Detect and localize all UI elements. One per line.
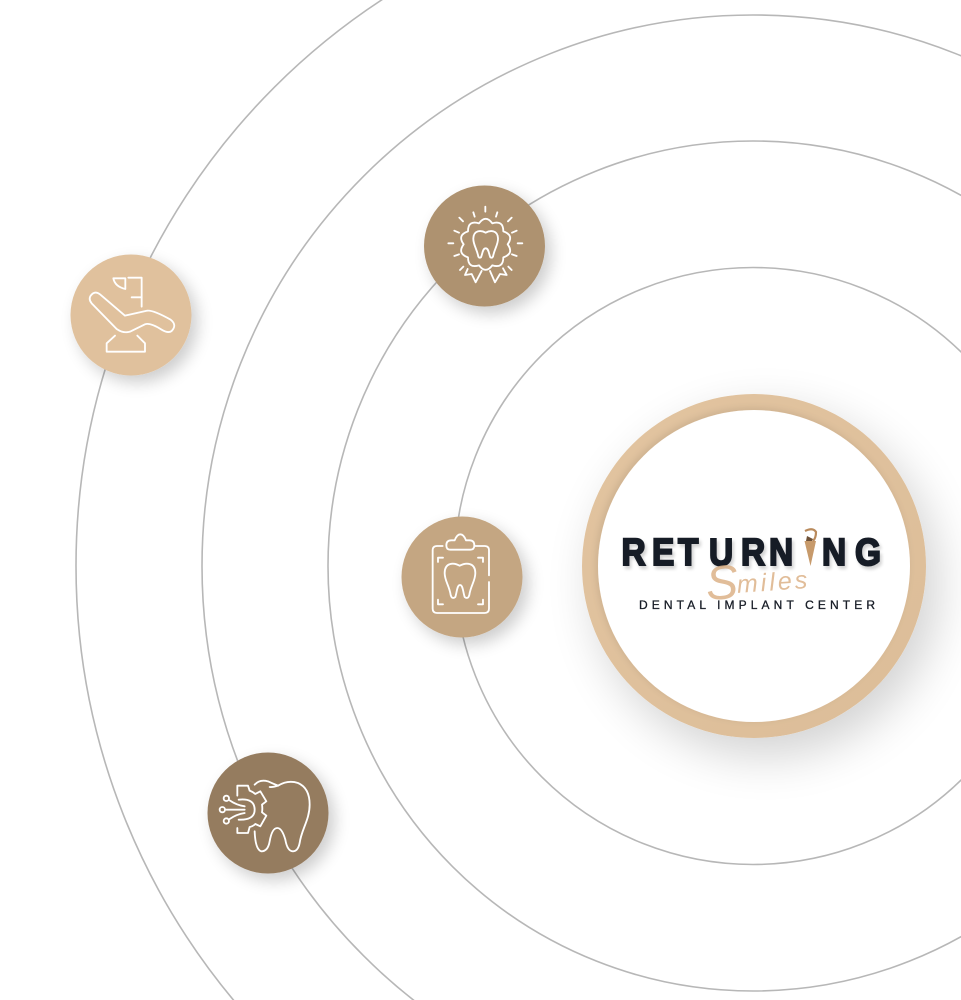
icon: tooth on clipboard — [433, 534, 489, 613]
badge: dental chair — [70, 254, 192, 376]
icon: tooth rosette award — [448, 207, 522, 282]
icon: dental chair — [90, 278, 174, 352]
badge: award tooth — [424, 186, 545, 306]
logo script: Smiles: miles — [736, 566, 811, 599]
badge: clipboard tooth — [402, 516, 522, 638]
logo wordmark: RETURNING: RETURN ING — [621, 531, 881, 573]
logo tagline: DENTAL IMPLANT CENTER — [639, 598, 875, 612]
logo script: Smiles: S — [704, 556, 740, 611]
central logo badge — [582, 394, 926, 738]
icon: tooth with gear and air spray — [220, 781, 310, 851]
badge: tooth gear — [208, 752, 328, 874]
icon: dental implant in logo — [804, 529, 816, 566]
